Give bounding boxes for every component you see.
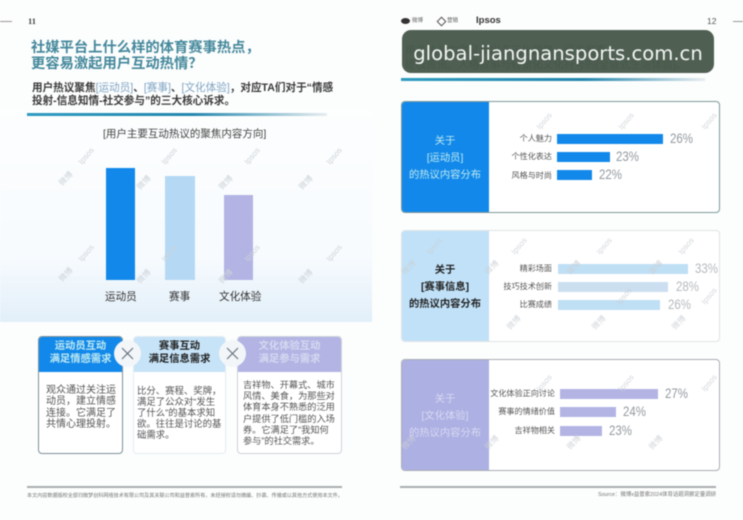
footnote left: 本文内容数据版权全部归微梦创科网络技术有限公司及其关联公司和益普索所有，未经授权请勿摘编、抄袭、传播或以其他方式使用本文件。 bbox=[27, 493, 343, 499]
card text bbox=[136, 385, 222, 440]
watermarks: Ipsos bbox=[77, 146, 96, 166]
panel side heading bbox=[401, 101, 489, 213]
card header bbox=[237, 336, 342, 372]
watermarks right: 微博 bbox=[589, 313, 608, 331]
card text: 参与”的社交需求。 bbox=[243, 436, 320, 446]
page number right: 12 bbox=[707, 16, 716, 26]
bar: 赛事 bbox=[165, 176, 195, 280]
card header: 文化体验互动 bbox=[259, 341, 320, 352]
logo: Ipsos: Ipsos bbox=[476, 15, 501, 26]
card text: 观众通过关注运 bbox=[46, 385, 116, 396]
footer line right bbox=[400, 486, 716, 488]
card header bbox=[38, 336, 123, 372]
obscured intro text: 用户热议内容呈现出多元化趋势，涵盖赛事 bbox=[405, 45, 606, 57]
intro text bbox=[32, 80, 334, 106]
panel side heading: 关于 bbox=[435, 136, 455, 147]
row 精彩场面: 33% bbox=[695, 260, 718, 276]
obscured intro text bbox=[405, 44, 705, 72]
bar chart: 赛事信息 bbox=[503, 260, 718, 312]
card text: 券。它满足了“我知何 bbox=[243, 425, 329, 435]
row 精彩场面 bbox=[519, 260, 718, 276]
watermarks right: 微博 bbox=[482, 433, 501, 451]
watermarks right: Ipsos bbox=[535, 111, 554, 131]
card: 赛事互动 bbox=[133, 336, 226, 454]
watermarks: 微博 bbox=[56, 265, 75, 283]
row 吉祥物相关 bbox=[514, 422, 632, 438]
watermarks right: Ipsos bbox=[595, 236, 614, 256]
watermarks: Ipsos bbox=[243, 243, 262, 263]
card text: 比分、赛程、奖牌， bbox=[137, 385, 221, 396]
watermarks: 微博 bbox=[296, 173, 315, 191]
card text: 础需求。 bbox=[137, 429, 175, 440]
row 比赛成绩: 比赛成绩 bbox=[520, 300, 552, 309]
panel side heading: 的热议内容分布 bbox=[409, 299, 481, 310]
watermarks right: Ipsos bbox=[615, 286, 634, 306]
watermarks right: Ipsos bbox=[700, 286, 719, 306]
logo: partner: 营销 bbox=[447, 18, 458, 24]
watermarks: Ipsos bbox=[77, 243, 96, 263]
label: 文化体验: 文化体验 bbox=[219, 291, 261, 303]
row 个性化表达 bbox=[511, 148, 640, 164]
watermarks right: 微博 bbox=[399, 258, 418, 276]
card: 文化体验互动 bbox=[237, 336, 342, 454]
watermarks right: 微博 bbox=[646, 433, 665, 451]
card text: 吉祥物、开幕式、城市 bbox=[243, 380, 335, 390]
row 比赛成绩: 26% bbox=[668, 296, 691, 312]
card text: 户提供了低门槛的入场 bbox=[243, 414, 335, 424]
row 比赛成绩 bbox=[520, 296, 691, 312]
label: 运动员: 运动员 bbox=[105, 291, 137, 303]
intro text: 投射-信息知情-社交参与”的三大核心诉求。 bbox=[32, 94, 235, 106]
watermarks: 微博 bbox=[134, 267, 153, 285]
panel side heading: 的热议内容分布 bbox=[409, 428, 481, 439]
card header: 满足参与需求 bbox=[259, 354, 320, 365]
card header: 运动员互动 bbox=[55, 341, 106, 352]
watermark banner bbox=[402, 30, 714, 73]
row 吉祥物相关: 23% bbox=[609, 422, 632, 438]
card text: 共情心理投射。 bbox=[46, 419, 116, 430]
panel side heading bbox=[401, 230, 489, 342]
watermarks right: Ipsos bbox=[535, 373, 554, 393]
watermarks: Ipsos bbox=[160, 146, 179, 166]
chart title: [用户主要互动热议的聚焦内容方向] bbox=[103, 128, 266, 140]
watermarks: Ipsos bbox=[325, 146, 344, 166]
card header: 满足情感需求 bbox=[50, 354, 111, 365]
bar chart: 文化体验 bbox=[490, 385, 688, 438]
title: 更容易激起用户互动热情？ bbox=[31, 56, 203, 72]
row 个人魅力 bbox=[520, 130, 694, 146]
panel side heading: 的热议内容分布 bbox=[409, 170, 481, 181]
watermarks right: Ipsos bbox=[425, 236, 444, 256]
card text bbox=[242, 380, 335, 446]
row 吉祥物相关: 吉祥物相关 bbox=[515, 426, 555, 435]
title bbox=[30, 38, 260, 72]
watermarks: Ipsos bbox=[325, 243, 344, 263]
watermarks right: 微博 bbox=[399, 433, 418, 451]
watermarks right: Ipsos bbox=[677, 236, 696, 256]
watermarks: 微博 bbox=[216, 267, 235, 285]
row 文化体验正向讨论: 文化体验正向讨论 bbox=[490, 389, 555, 398]
watermark banner: global-jiangnansports.com.cn bbox=[413, 42, 703, 65]
bar chart bbox=[104, 167, 262, 303]
watermarks right: 微博 bbox=[564, 433, 583, 451]
watermarks: 微博 bbox=[296, 267, 315, 285]
panel: 文化体验 bbox=[401, 359, 720, 471]
card header bbox=[133, 336, 226, 372]
panel side heading: [运动员] bbox=[427, 153, 463, 164]
row 风格与时尚 bbox=[511, 166, 622, 182]
panel: 运动员 bbox=[401, 101, 720, 213]
row 个性化表达: 23% bbox=[616, 148, 639, 164]
logo: Weibo bbox=[400, 16, 424, 25]
panel side heading: [文化体验] bbox=[422, 411, 468, 422]
row 赛事的情绪价值: 24% bbox=[623, 403, 646, 419]
icon: cross 1 bbox=[114, 340, 141, 367]
panel side heading: 关于 bbox=[435, 265, 455, 276]
logo: Weibo: 微博 bbox=[412, 18, 423, 24]
row 技巧技术创新 bbox=[503, 278, 699, 294]
intro text: 用户热议聚焦[运动员]、[赛事]、[文化体验]，对应TA们对于“情感 bbox=[32, 82, 333, 94]
row 个人魅力: 26% bbox=[670, 130, 693, 146]
bar: 运动员 bbox=[106, 168, 135, 280]
row 文化体验正向讨论 bbox=[490, 385, 688, 401]
card text: 满足了公众对“发生 bbox=[137, 396, 215, 407]
watermarks: 微博 bbox=[216, 173, 235, 191]
watermarks right: 微博 bbox=[482, 258, 501, 276]
icon: cross 2 bbox=[219, 340, 246, 367]
card text: 欲。往往是讨论的基 bbox=[137, 418, 221, 429]
card header: 满足信息需求 bbox=[149, 354, 210, 365]
title: 社媒平台上什么样的体育赛事热点， bbox=[31, 40, 260, 56]
watermarks right: Ipsos bbox=[700, 111, 719, 131]
watermarks right: Ipsos bbox=[700, 373, 719, 393]
watermarks right: Ipsos bbox=[617, 373, 636, 393]
row 精彩场面: 精彩场面 bbox=[520, 264, 552, 273]
footer line left bbox=[27, 486, 342, 488]
watermarks right: Ipsos bbox=[510, 236, 529, 256]
card text: 动员，建立情感 bbox=[46, 396, 116, 407]
card text: 体育本身不熟悉的泛用 bbox=[243, 402, 335, 412]
row 技巧技术创新: 技巧技术创新 bbox=[503, 282, 552, 291]
watermarks: Ipsos bbox=[160, 243, 179, 263]
label: 赛事: 赛事 bbox=[169, 291, 190, 303]
row 个性化表达: 个性化表达 bbox=[512, 152, 552, 161]
row 文化体验正向讨论: 27% bbox=[665, 385, 688, 401]
watermarks right: 微博 bbox=[564, 258, 583, 276]
watermarks right: 微博 bbox=[646, 258, 665, 276]
card text: 了什么”的基本求知 bbox=[137, 407, 215, 418]
watermarks: 微博 bbox=[134, 173, 153, 191]
watermarks: Ipsos bbox=[243, 146, 262, 166]
page number left: 11 bbox=[28, 16, 36, 26]
row 技巧技术创新: 28% bbox=[676, 278, 699, 294]
panel side heading: 关于 bbox=[435, 394, 455, 405]
card text bbox=[46, 384, 116, 430]
card text: 风情、美食，为那些对 bbox=[243, 391, 335, 401]
row 赛事的情绪价值: 赛事的情绪价值 bbox=[498, 407, 555, 416]
bar: 文化体验 bbox=[224, 195, 253, 280]
card text: 连接。它满足了 bbox=[46, 408, 116, 419]
obscured intro text: 硬核资讯、人格叙事与轻量化文化符号的[全景式生活体验]。 bbox=[405, 59, 686, 71]
card header: 赛事互动 bbox=[159, 341, 200, 352]
watermarks right: 微博 bbox=[669, 313, 688, 331]
row 赛事的情绪价值 bbox=[498, 403, 646, 419]
row 风格与时尚: 风格与时尚 bbox=[512, 171, 552, 180]
panel: left page chart background bbox=[0, 110, 372, 322]
logo: partner bbox=[436, 16, 458, 27]
row 风格与时尚: 22% bbox=[599, 166, 622, 182]
card: 运动员互动 bbox=[38, 336, 123, 454]
watermarks right: 微博 bbox=[504, 313, 523, 331]
panel side heading: [赛事信息] bbox=[421, 282, 469, 293]
watermarks right: Ipsos bbox=[617, 111, 636, 131]
source note: Source：微博x益普索2024体育话题洞察定量调研 bbox=[598, 492, 716, 498]
bar chart: 运动员 bbox=[511, 130, 694, 182]
panel: 赛事信息 bbox=[401, 230, 720, 342]
watermarks: 微博 bbox=[56, 169, 75, 187]
row 个人魅力: 个人魅力 bbox=[520, 134, 552, 143]
logos bbox=[400, 15, 501, 27]
panel side heading bbox=[401, 359, 489, 471]
